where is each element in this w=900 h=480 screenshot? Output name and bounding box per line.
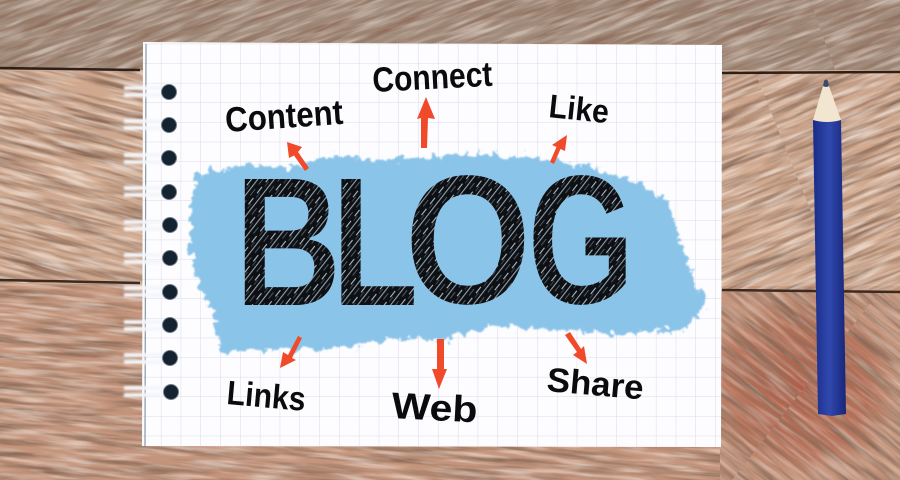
label: Connect: Connect (371, 55, 494, 100)
label: Content: Content (224, 93, 345, 140)
arrow: Share (565, 332, 587, 364)
heading: BLOG (234, 137, 635, 346)
arrow: Connect (417, 97, 435, 148)
label: Web: Web (391, 385, 479, 430)
arrow: Web (432, 339, 447, 389)
label: Links: Links (225, 374, 307, 419)
arrow: Content (287, 142, 309, 171)
notebook page (124, 42, 722, 447)
spiral binding (124, 84, 178, 400)
label: Share: Share (545, 361, 645, 407)
pencil (813, 80, 846, 416)
binding holes (162, 84, 178, 400)
heading: BLOG: B (234, 139, 342, 346)
arrow: Links (280, 336, 302, 368)
label: Like: Like (547, 87, 611, 130)
heading: BLOG: G (527, 137, 635, 344)
heading: BLOG: L (331, 139, 419, 346)
binding rings (124, 88, 166, 395)
blue paint brush patch (190, 154, 706, 352)
arrow: Like (550, 135, 567, 164)
heading: BLOG: O (404, 137, 532, 344)
